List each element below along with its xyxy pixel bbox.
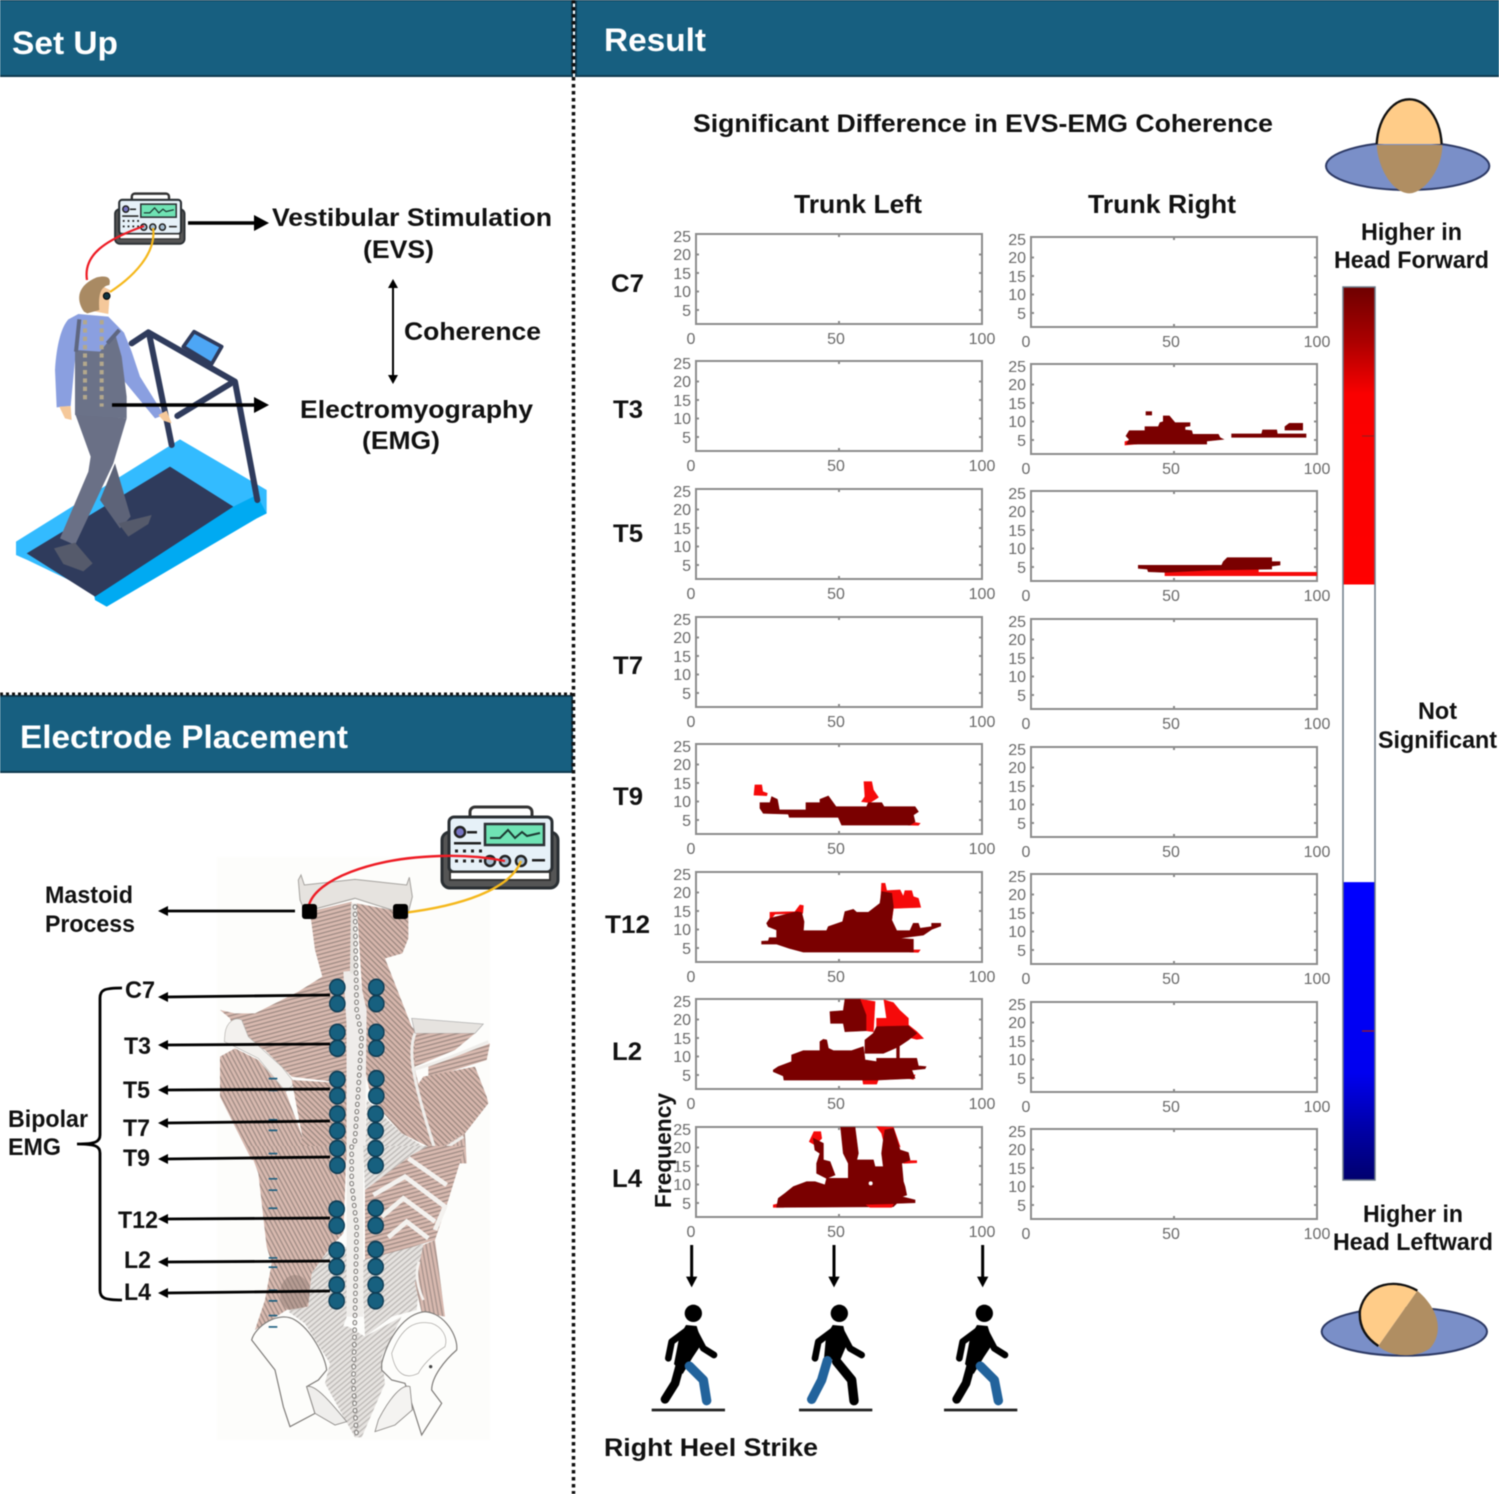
plot: L4 Trunk Left (673, 1122, 995, 1241)
plot: L4 Trunk Left: 50 (827, 1224, 845, 1241)
plot: C7 Trunk Left (673, 229, 995, 348)
arrow: stimulation (188, 215, 269, 231)
plot: L2 Trunk Left: 50 (827, 1096, 845, 1113)
mastoid electrodes (302, 904, 408, 919)
plot: T9 Trunk Left: 20 (673, 757, 691, 774)
plot: L2 Trunk Right (1008, 997, 1330, 1116)
electrode labels: T12 (118, 1207, 158, 1234)
plot: C7 Trunk Right: 15 (1008, 269, 1026, 286)
electrode labels (118, 977, 158, 1306)
icon: walker next right heel strike (944, 1305, 1017, 1410)
lower back muscles and pelvis (248, 1146, 465, 1437)
column title: Trunk Left: Trunk Left (794, 189, 922, 219)
label: Mastoid Process: Process (45, 911, 135, 938)
wires: mastoid to large device (309, 856, 521, 913)
plot: T9 Trunk Left: 100 (969, 841, 995, 858)
row labels: L2 (612, 1038, 642, 1066)
label: Higher in Head Forward: Head Forward (1334, 247, 1489, 274)
plot: L4 Trunk Left: 15 (673, 1159, 691, 1176)
column title: Trunk Right: Trunk Right (1088, 189, 1236, 219)
plot: T12 Trunk Right: 10 (1008, 924, 1026, 941)
treadmill deck (16, 439, 267, 607)
electrode arrows (158, 992, 330, 1298)
plot: C7 Trunk Left: 50 (827, 331, 845, 348)
plot: L4 Trunk Left: 10 (673, 1177, 691, 1194)
arrow: mastoid (158, 906, 295, 916)
plot: T9 Trunk Right: 5 (1017, 816, 1026, 833)
plot: C7 Trunk Right: 5 (1017, 306, 1026, 323)
plot: T7 Trunk Left: 50 (827, 714, 845, 731)
label: Higher in Head Leftward (1333, 1201, 1493, 1256)
plot: L2 Trunk Left (673, 994, 995, 1113)
plot: T5 Trunk Left: 25 (673, 484, 691, 501)
label: Mastoid Process: Mastoid (45, 882, 133, 909)
label: Bipolar EMG (8, 1106, 88, 1161)
plot: T9 Trunk Left: 5 (682, 813, 691, 830)
row labels: T9 (613, 783, 643, 811)
header: Set Up (0, 0, 572, 76)
plot: C7 Trunk Right: 10 (1008, 287, 1026, 304)
plot: T3 Trunk Left: 100 (969, 458, 995, 475)
label: Vestibular Stimulation (EVS): (EVS) (363, 236, 434, 264)
plot: T5 Trunk Left (673, 484, 995, 603)
plot: T12 Trunk Right: 25 (1008, 869, 1026, 886)
header: Result: Result (604, 22, 706, 58)
arrow: gait end (977, 1245, 988, 1287)
plot: T3 Trunk Left: 0 (687, 458, 696, 475)
plot: T3 Trunk Left: 50 (827, 458, 845, 475)
plot: L4 Trunk Right: 10 (1008, 1179, 1026, 1196)
plot: L2 Trunk Right: 0 (1022, 1099, 1031, 1116)
plot: T12 Trunk Right: 0 (1022, 971, 1031, 988)
plot: C7 Trunk Left: 25 (673, 229, 691, 246)
plot: L4 Trunk Left: 100 (969, 1224, 995, 1241)
plot: L2 Trunk Right: 10 (1008, 1052, 1026, 1069)
electrode labels: T3 (124, 1033, 151, 1060)
axis label: Frequency: Frequency (650, 1093, 676, 1208)
electrode labels: C7 (125, 977, 155, 1004)
label: Higher in Head Forward (1334, 219, 1489, 274)
electrode labels: L2 (124, 1247, 151, 1274)
wires: head to small device (87, 226, 153, 292)
bracket (77, 988, 122, 1300)
plot: T7 Trunk Right: 25 (1008, 614, 1026, 631)
label: Electromyography (EMG): Electromyography (300, 396, 533, 424)
plot: T9 Trunk Left: 15 (673, 776, 691, 793)
label: Higher in Head Leftward: Head Leftward (1333, 1229, 1493, 1256)
plot: L2 Trunk Left: 100 (969, 1096, 995, 1113)
header: Result (576, 0, 1499, 76)
plot: T9 Trunk Left: 0 (687, 841, 696, 858)
color bar (1343, 287, 1375, 1180)
plot: T7 Trunk Right: 20 (1008, 632, 1026, 649)
plot: T12 Trunk Left: 10 (673, 922, 691, 939)
label: Electromyography (EMG) (300, 396, 533, 455)
plot: T7 Trunk Left: 25 (673, 612, 691, 629)
plot: T3 Trunk Left: 10 (673, 411, 691, 428)
plot: T9 Trunk Left: 25 (673, 739, 691, 756)
plot: L4 Trunk Right (1008, 1124, 1330, 1243)
plot: L4 Trunk Left: 5 (682, 1196, 691, 1213)
plot: L2 Trunk Right: 100 (1304, 1099, 1330, 1116)
treadmill posts and console (132, 332, 257, 500)
arrow: EMG (112, 397, 269, 413)
person (54, 276, 172, 571)
row labels: T5 (613, 520, 643, 548)
plot: T3 Trunk Right: 50 (1162, 461, 1180, 478)
plot: T9 Trunk Right: 50 (1162, 844, 1180, 861)
label: Bipolar EMG: EMG (8, 1134, 61, 1161)
plot: T12 Trunk Left: 50 (827, 969, 845, 986)
label: Coherence: Coherence (404, 318, 541, 346)
plot: C7 Trunk Right: 50 (1162, 334, 1180, 351)
plot: T3 Trunk Right: 20 (1008, 377, 1026, 394)
plot: L4 Trunk Right: 5 (1017, 1198, 1026, 1215)
icon: walker left heel strike (799, 1305, 872, 1410)
plot: L2 Trunk Right: 5 (1017, 1071, 1026, 1088)
plot: T9 Trunk Right: 10 (1008, 797, 1026, 814)
plot: T9 Trunk Left (673, 739, 995, 858)
label: Bipolar EMG: Bipolar (8, 1106, 88, 1133)
plot: T7 Trunk Right: 0 (1022, 716, 1031, 733)
plot: T7 Trunk Right: 100 (1304, 716, 1330, 733)
plot: T12 Trunk Right: 100 (1304, 971, 1330, 988)
plot: T5 Trunk Right (1008, 486, 1330, 605)
plot: T5 Trunk Right: 20 (1008, 504, 1026, 521)
label: Mastoid Process (45, 882, 135, 938)
plot: T3 Trunk Left (673, 356, 995, 475)
plot: T7 Trunk Left: 5 (682, 686, 691, 703)
plot: T5 Trunk Left: 5 (682, 558, 691, 575)
label: Higher in Head Leftward: Higher in (1363, 1201, 1463, 1228)
plot: T5 Trunk Right: 100 (1304, 588, 1330, 605)
arrow: coherence double (388, 279, 398, 384)
plot: T12 Trunk Left: 100 (969, 969, 995, 986)
plot: L2 Trunk Left: 0 (687, 1096, 696, 1113)
plot: T9 Trunk Right: 15 (1008, 779, 1026, 796)
plot: C7 Trunk Right: 20 (1008, 250, 1026, 267)
row labels: T12 (605, 911, 650, 939)
heatmap: T9 Trunk Left (754, 782, 920, 825)
label: Vestibular Stimulation (EVS) (272, 204, 552, 264)
heatmap: L4 Trunk Left (773, 1127, 917, 1207)
plot: T12 Trunk Right: 5 (1017, 943, 1026, 960)
heatmap: T3 Trunk Right (1125, 412, 1306, 445)
plot: L2 Trunk Right: 50 (1162, 1099, 1180, 1116)
header: Set Up: Set Up (12, 25, 118, 61)
icon: head leftward (1322, 1284, 1487, 1356)
chart title: Significant Difference in EVS-EMG Coherence (693, 110, 1273, 138)
plot: T3 Trunk Left: 5 (682, 430, 691, 447)
plot: T12 Trunk Left: 0 (687, 969, 696, 986)
row labels (605, 270, 650, 1193)
plot: T12 Trunk Right: 50 (1162, 971, 1180, 988)
plot: T7 Trunk Left: 20 (673, 630, 691, 647)
heatmap: T12 Trunk Left (762, 883, 941, 952)
plot: C7 Trunk Left: 0 (687, 331, 696, 348)
plot: T12 Trunk Left: 20 (673, 885, 691, 902)
plot: T12 Trunk Left: 5 (682, 941, 691, 958)
heatmap: L2 Trunk Left (773, 999, 926, 1084)
plot: L4 Trunk Right: 15 (1008, 1161, 1026, 1178)
plot: T3 Trunk Right (1008, 359, 1330, 478)
plot: C7 Trunk Right: 25 (1008, 232, 1026, 249)
plot: T7 Trunk Left: 15 (673, 649, 691, 666)
icon: stimulator device small (115, 194, 185, 244)
plot: T5 Trunk Left: 100 (969, 586, 995, 603)
plot: T12 Trunk Left: 15 (673, 904, 691, 921)
plot: T3 Trunk Right: 5 (1017, 433, 1026, 450)
plot: L4 Trunk Left: 25 (673, 1122, 691, 1139)
electrode labels: L4 (124, 1279, 152, 1306)
plot: C7 Trunk Left: 10 (673, 284, 691, 301)
plot: T5 Trunk Right: 5 (1017, 560, 1026, 577)
plot: C7 Trunk Left: 100 (969, 331, 995, 348)
plot: L2 Trunk Left: 20 (673, 1012, 691, 1029)
row labels: C7 (611, 270, 644, 298)
plot: T7 Trunk Right: 10 (1008, 669, 1026, 686)
heatmap: T5 Trunk Right (1138, 558, 1317, 576)
electrodes on the back (269, 979, 384, 1327)
plot: C7 Trunk Left: 15 (673, 266, 691, 283)
plot: T3 Trunk Right: 0 (1022, 461, 1031, 478)
plot: T12 Trunk Left: 25 (673, 867, 691, 884)
icon: walker right heel strike (652, 1305, 725, 1410)
label: Electromyography (EMG): (EMG) (362, 427, 440, 455)
plot: T7 Trunk Right (1008, 614, 1330, 733)
illustration: treadmill and walking person (16, 276, 267, 607)
electrode labels: T7 (123, 1115, 150, 1142)
plot: T5 Trunk Left: 0 (687, 586, 696, 603)
header: Electrode Placement: Electrode Placement (20, 719, 348, 755)
plot: L2 Trunk Left: 15 (673, 1031, 691, 1048)
row labels: T7 (613, 652, 643, 680)
plot: T12 Trunk Right: 15 (1008, 906, 1026, 923)
plot: C7 Trunk Right: 100 (1304, 334, 1330, 351)
plot: T3 Trunk Left: 20 (673, 374, 691, 391)
plot: T7 Trunk Left: 0 (687, 714, 696, 731)
header: Electrode Placement (0, 696, 572, 772)
plot: L4 Trunk Left: 0 (687, 1224, 696, 1241)
plot: L4 Trunk Right: 0 (1022, 1226, 1031, 1243)
plot: T12 Trunk Right (1008, 869, 1330, 988)
plot: L2 Trunk Right: 15 (1008, 1034, 1026, 1051)
electrode labels: T9 (123, 1145, 150, 1172)
label: Vestibular Stimulation (EVS): Vestibular Stimulation (272, 204, 552, 232)
plot: T3 Trunk Left: 25 (673, 356, 691, 373)
electrode labels: T5 (123, 1077, 150, 1104)
plot: T5 Trunk Left: 15 (673, 521, 691, 538)
plot: L2 Trunk Left: 10 (673, 1049, 691, 1066)
plot: L4 Trunk Right: 50 (1162, 1226, 1180, 1243)
row labels: L4 (612, 1165, 642, 1193)
plot: C7 Trunk Left: 20 (673, 247, 691, 264)
plot: T5 Trunk Left: 20 (673, 502, 691, 519)
plot: T9 Trunk Left: 10 (673, 794, 691, 811)
plot: T5 Trunk Right: 0 (1022, 588, 1031, 605)
plot: T5 Trunk Left: 10 (673, 539, 691, 556)
label: Not Significant (1378, 698, 1497, 754)
plot: T3 Trunk Right: 25 (1008, 359, 1026, 376)
plot: T3 Trunk Left: 15 (673, 393, 691, 410)
plot: L4 Trunk Right: 25 (1008, 1124, 1026, 1141)
plot: C7 Trunk Left: 5 (682, 303, 691, 320)
label: Higher in Head Forward: Higher in (1361, 219, 1462, 246)
plot: T5 Trunk Right: 15 (1008, 523, 1026, 540)
plot: L2 Trunk Left: 25 (673, 994, 691, 1011)
plot: T9 Trunk Right (1008, 742, 1330, 861)
plot: T5 Trunk Right: 10 (1008, 541, 1026, 558)
plot: T7 Trunk Right: 15 (1008, 651, 1026, 668)
plot: T3 Trunk Right: 15 (1008, 396, 1026, 413)
plot: T5 Trunk Left: 50 (827, 586, 845, 603)
arrow: gait mid (828, 1245, 840, 1287)
plot: C7 Trunk Right: 0 (1022, 334, 1031, 351)
plot: T7 Trunk Left: 100 (969, 714, 995, 731)
plot: L2 Trunk Left: 5 (682, 1068, 691, 1085)
plot: L4 Trunk Right: 100 (1304, 1226, 1330, 1243)
plot: T3 Trunk Right: 10 (1008, 414, 1026, 431)
plot: T7 Trunk Left: 10 (673, 667, 691, 684)
label: Not Significant: Not (1418, 698, 1457, 725)
plot: T9 Trunk Right: 25 (1008, 742, 1026, 759)
plot: T12 Trunk Right: 20 (1008, 887, 1026, 904)
plot: L4 Trunk Right: 20 (1008, 1142, 1026, 1159)
label: Not Significant: Significant (1378, 727, 1497, 754)
plot: T7 Trunk Right: 5 (1017, 688, 1026, 705)
plot: T12 Trunk Left (673, 867, 995, 986)
arrow: gait start (686, 1245, 697, 1287)
plot: T7 Trunk Left (673, 612, 995, 731)
label: Right Heel Strike: Right Heel Strike (604, 1434, 818, 1462)
plot: L4 Trunk Left: 20 (673, 1140, 691, 1157)
plot: T9 Trunk Right: 100 (1304, 844, 1330, 861)
plot: T7 Trunk Right: 50 (1162, 716, 1180, 733)
plot: T9 Trunk Right: 0 (1022, 844, 1031, 861)
row labels: T3 (613, 396, 643, 424)
illustration: back muscles anatomy (217, 857, 490, 1440)
upper back muscles (220, 875, 490, 1163)
plot: L2 Trunk Right: 25 (1008, 997, 1026, 1014)
plot: C7 Trunk Right (1008, 232, 1330, 351)
icon: head forward (1326, 99, 1489, 193)
plot: T5 Trunk Right: 25 (1008, 486, 1026, 503)
plot: T3 Trunk Right: 100 (1304, 461, 1330, 478)
plot: L2 Trunk Right: 20 (1008, 1015, 1026, 1032)
icon: stimulator device large (442, 807, 558, 888)
plot: T9 Trunk Right: 20 (1008, 760, 1026, 777)
plot: T5 Trunk Right: 50 (1162, 588, 1180, 605)
plot: T9 Trunk Left: 50 (827, 841, 845, 858)
gait arrows and walkers (652, 1245, 1017, 1410)
